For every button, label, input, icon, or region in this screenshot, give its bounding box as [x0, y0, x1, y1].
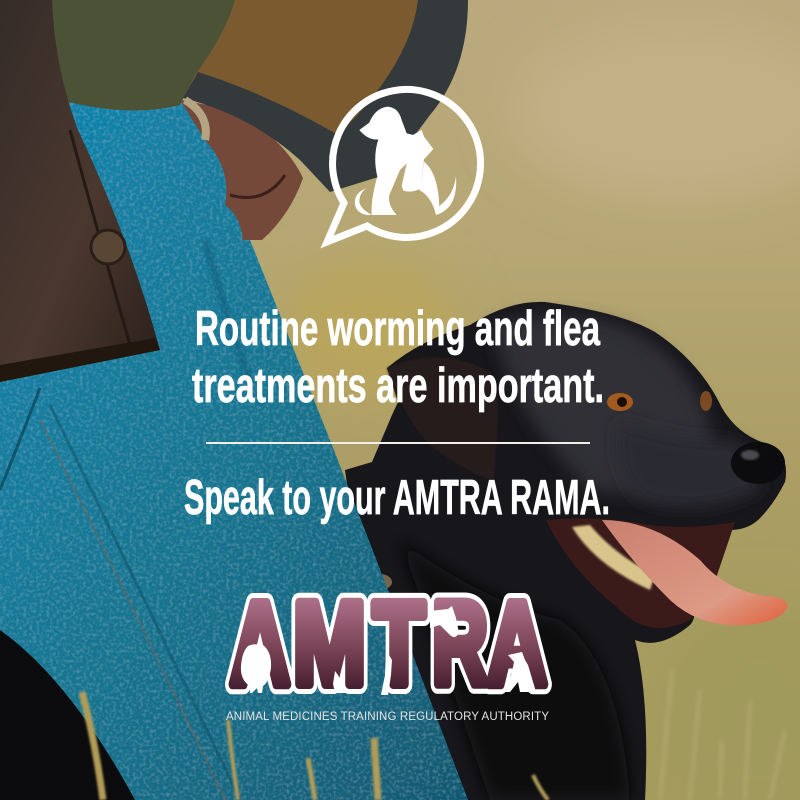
- logo outline: T: [373, 578, 425, 710]
- photo: person: [0, 0, 468, 800]
- speech bubble outline: [327, 89, 481, 242]
- leather jacket: [0, 0, 160, 382]
- dog collar: [368, 574, 392, 590]
- dog chest fur: [400, 540, 630, 800]
- logo animal: cat: [333, 671, 350, 693]
- dog body and head: [345, 302, 786, 800]
- jacket button: [91, 230, 125, 264]
- logo outline: M: [293, 578, 366, 710]
- logo outline: R: [432, 578, 488, 710]
- logo letters: A: [230, 578, 290, 710]
- heading: routine treatments: [192, 302, 604, 413]
- logo letters: [230, 578, 547, 710]
- tan jacket lining: [180, 0, 425, 140]
- icon: speech bubble with pets: [327, 89, 481, 242]
- logo letters: M: [293, 578, 366, 710]
- photo: black dog: [345, 302, 788, 800]
- dog tongue: [602, 520, 788, 625]
- foreground grass stalks: [82, 692, 548, 800]
- heading: routine treatments: Routine worming and flea: [195, 302, 600, 356]
- logo letters: A: [487, 578, 547, 710]
- head sheen: [490, 315, 711, 495]
- watch strap loop: [185, 100, 206, 140]
- pet silhouettes: [355, 107, 456, 215]
- hand: [180, 100, 303, 240]
- logo animal: sheep: [241, 644, 271, 693]
- divider: [206, 442, 590, 444]
- dog teeth: [572, 525, 655, 590]
- dog eye right: [700, 391, 712, 411]
- logo letters: T: [373, 578, 425, 710]
- leather collar: [183, 0, 468, 192]
- logo letters: R: [432, 578, 488, 710]
- denim jeans: [0, 95, 468, 800]
- green sweater: [30, 0, 235, 110]
- dog nose: [731, 442, 785, 484]
- logo outline: [230, 578, 547, 710]
- logo outline: A: [487, 578, 547, 710]
- dog ear: [387, 357, 498, 480]
- heading: routine treatments: treatments are important.: [192, 359, 604, 413]
- logo: AMTRA: [226, 578, 549, 723]
- dog mouth: [546, 518, 735, 628]
- dark shape behind jeans: [0, 630, 135, 800]
- logo strapline: ANIMAL MEDICINES TRAINING REGULATORY AUTHORITY: [226, 711, 549, 723]
- logo animal: horse leg: [381, 650, 392, 695]
- dog eye left: [607, 393, 633, 411]
- logo animal: horse: [430, 606, 459, 637]
- logo outline: A: [230, 578, 290, 710]
- logo animal: dog: [505, 652, 536, 692]
